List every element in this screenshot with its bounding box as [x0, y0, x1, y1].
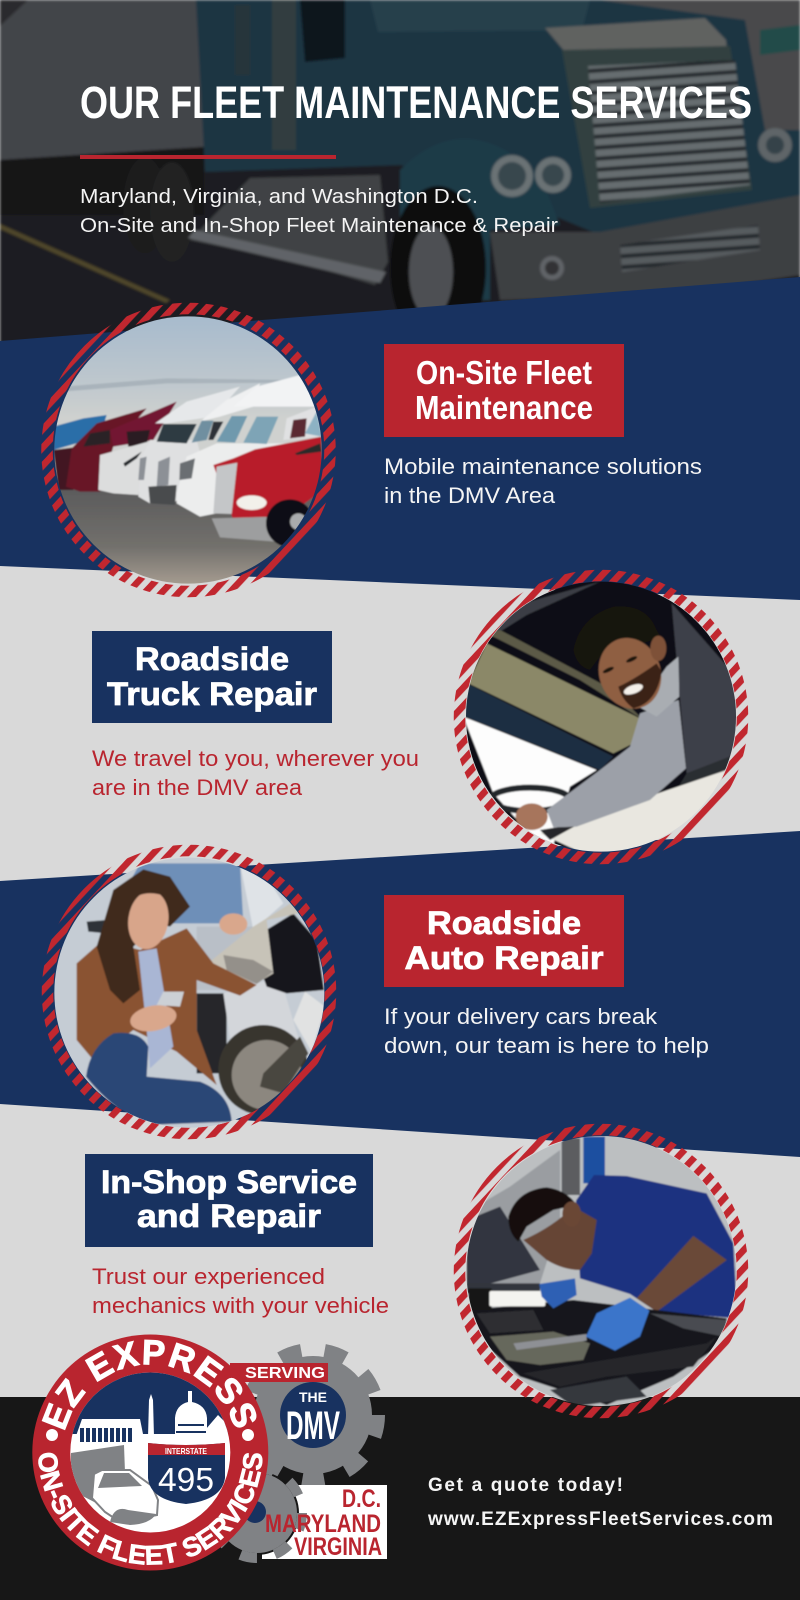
callout: service areas: D.C. [342, 1485, 381, 1513]
subtitle [80, 185, 558, 237]
icon: large gear with serving the DMV [230, 1350, 378, 1480]
striped ring 3 [48, 850, 330, 1134]
navy heading box 2 [92, 631, 332, 723]
logo: EZ Express badge [32, 1334, 387, 1570]
description 1: Mobile maintenance solutions [384, 454, 702, 479]
navy heading box 2: Truck Repair [107, 676, 317, 712]
footer call to action: Get a quote today! [428, 1475, 623, 1496]
description 3: If your delivery cars break [384, 1004, 658, 1029]
red heading box 3: Roadside [427, 905, 581, 941]
subtitle: Maryland, Virginia, and Washington D.C. [80, 185, 478, 208]
icon: large gear with serving the DMV: DMV [286, 1404, 340, 1448]
red heading box 1 [384, 344, 624, 437]
callout: service areas: VIRGINIA [294, 1533, 382, 1561]
icon: large gear with serving the DMV: SERVING [245, 1365, 325, 1382]
description 4: mechanics with your vehicle [92, 1293, 389, 1318]
icon: interstate 495 shield: INTERSTATE [165, 1446, 207, 1456]
photo: smiling truck driver [463, 580, 740, 857]
navy heading box 4: and Repair [137, 1198, 321, 1234]
panel: on-site fleet maintenance [47, 308, 702, 592]
panel: roadside truck repair [92, 576, 742, 858]
description 4: Trust our experienced [92, 1264, 325, 1289]
blue band 2 [0, 831, 800, 1157]
title underline [80, 155, 336, 159]
navy heading box 2: Roadside [135, 641, 289, 677]
navy heading box 4 [85, 1154, 373, 1247]
red heading box 3: Auto Repair [404, 940, 604, 976]
panel: roadside auto repair [48, 850, 709, 1134]
striped ring 4 [460, 1130, 742, 1412]
panel: in-shop service and repair [85, 1130, 742, 1412]
footer bar [0, 1397, 800, 1600]
striped ring 2 [460, 576, 742, 858]
description 1 [384, 454, 702, 508]
icon: red badge ring with arc text [32, 1334, 268, 1570]
red heading box 3 [384, 895, 624, 987]
description 4 [92, 1264, 389, 1318]
footer call to action: www.EZExpressFleetServices.com [427, 1509, 773, 1530]
blue band 1 [0, 277, 800, 600]
icon: large gear with serving the DMV: THE [299, 1389, 327, 1405]
icon: interstate 495 shield [148, 1443, 225, 1504]
striped ring 1 [47, 308, 330, 592]
icon: red badge ring with arc text: EZ EXPRESS [42, 1340, 256, 1430]
footer call to action [427, 1475, 773, 1530]
description 3: down, our team is here to help [384, 1033, 709, 1058]
header photo: parked blue truck [0, 0, 800, 350]
description 2: are in the DMV area [92, 775, 303, 800]
description 2 [92, 746, 419, 800]
icon: red badge ring with arc text: ON-SITE FLEET SERVICES [38, 1452, 263, 1565]
photo: row of parked trucks [50, 313, 327, 587]
photo: mechanic working on engine [463, 1133, 740, 1410]
description 2: We travel to you, wherever you [92, 746, 419, 771]
description 3 [384, 1004, 709, 1058]
navy heading box 4: In-Shop Service [101, 1164, 357, 1200]
photo: woman beside damaged car [50, 853, 330, 1133]
description 1: in the DMV Area [384, 483, 556, 508]
icon: interstate 495 shield: 495 [158, 1461, 214, 1498]
icon: DC skyline and van [70, 1372, 231, 1534]
callout: service areas [212, 1468, 387, 1561]
red heading box 1: Maintenance [415, 389, 593, 426]
callout: service areas: MARYLAND [265, 1510, 381, 1538]
red heading box 1: On-Site Fleet [416, 354, 592, 391]
subtitle: On-Site and In-Shop Fleet Maintenance & Repair [80, 214, 558, 237]
